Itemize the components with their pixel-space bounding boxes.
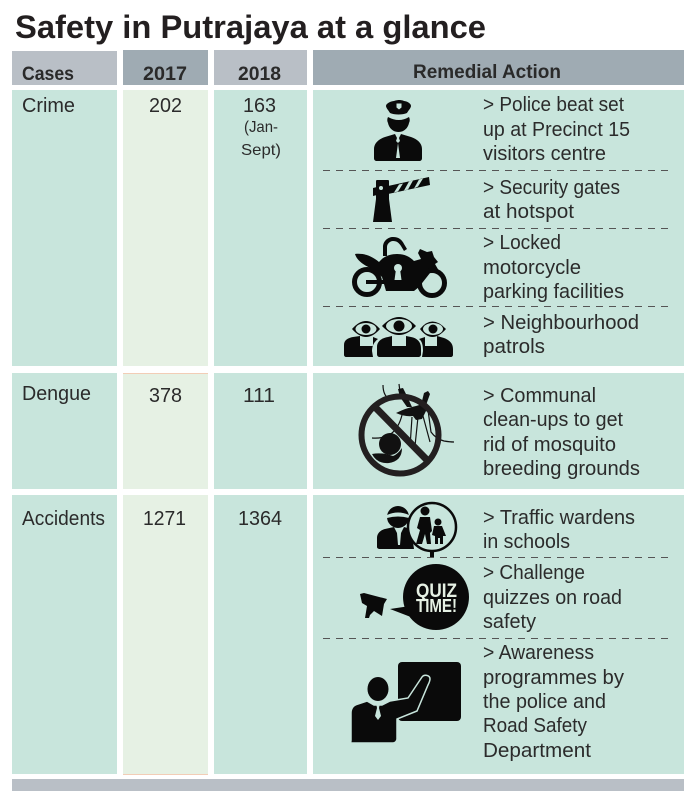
crime 2018 value: Sept) bbox=[241, 142, 281, 159]
icon: traffic warden with school crossing sign bbox=[377, 503, 456, 557]
dengue remedial text: rid of mosquito bbox=[483, 434, 616, 456]
dengue 2018 value bbox=[214, 373, 307, 489]
crime 2018 value: 163 bbox=[243, 95, 276, 117]
dengue label bbox=[12, 373, 117, 489]
accidents remedial text: programmes by bbox=[483, 667, 624, 689]
accidents remedial text: quizzes on road bbox=[483, 587, 622, 609]
crime remedial panel bbox=[313, 90, 684, 366]
header: remedial action bbox=[313, 50, 684, 85]
crime remedial text: patrols bbox=[483, 336, 545, 358]
icon: motorcycle with padlock bbox=[354, 237, 444, 296]
icon: quiz time speech bubble and megaphone: QUIZ bbox=[416, 581, 457, 602]
accidents 2018 value: 1364 bbox=[238, 508, 282, 530]
crime remedial text: > Security gates bbox=[483, 177, 620, 199]
crime remedial text: > Neighbourhood bbox=[483, 312, 639, 334]
crime 2018 value bbox=[214, 90, 307, 366]
dengue remedial panel bbox=[313, 373, 684, 489]
icon: quiz time speech bubble and megaphone bbox=[360, 564, 469, 630]
header: cases: Cases bbox=[22, 63, 74, 85]
accidents remedial text: Department bbox=[483, 740, 591, 762]
row: crime bbox=[12, 90, 684, 366]
row: accidents bbox=[12, 495, 684, 775]
dengue remedial text: > Communal bbox=[483, 385, 596, 407]
header: 2018 bbox=[214, 50, 307, 85]
crime label: Crime bbox=[22, 95, 75, 117]
accidents remedial text: > Challenge bbox=[483, 562, 585, 584]
header: 2017 bbox=[123, 50, 208, 85]
accidents remedial text: safety bbox=[483, 611, 536, 633]
title: Safety in Putrajaya at a glance bbox=[15, 9, 486, 45]
crime remedial text: > Locked bbox=[483, 232, 561, 254]
icon: police officer bbox=[374, 100, 422, 161]
crime 2017 value bbox=[123, 90, 208, 366]
icon: no mosquito sign bbox=[362, 384, 454, 474]
crime remedial text: visitors centre bbox=[483, 143, 606, 165]
header: 2018: 2018 bbox=[238, 63, 281, 85]
icon: neighbourhood watch eyes and people bbox=[344, 317, 453, 357]
accidents remedial panel bbox=[313, 495, 684, 774]
dengue remedial text: breeding grounds bbox=[483, 458, 640, 480]
dengue 2018 value: 111 bbox=[243, 385, 275, 407]
header: cases bbox=[12, 51, 117, 85]
crime remedial text: motorcycle bbox=[483, 257, 581, 279]
dengue 2017 value: 378 bbox=[149, 385, 182, 407]
icon: quiz time speech bubble and megaphone: TIME! bbox=[416, 596, 457, 616]
crime remedial text: up at Precinct 15 bbox=[483, 119, 630, 141]
crime remedial text: parking facilities bbox=[483, 281, 624, 303]
dengue 2017 value bbox=[123, 373, 208, 489]
accidents 2018 value bbox=[214, 495, 307, 774]
crime remedial text: > Police beat set bbox=[483, 94, 624, 116]
crime remedial text: at hotspot bbox=[483, 201, 574, 223]
accidents remedial text: in schools bbox=[483, 531, 570, 553]
icon: security gate barrier bbox=[373, 177, 430, 222]
accidents remedial text: > Awareness bbox=[483, 642, 594, 664]
crime label bbox=[12, 90, 117, 366]
accidents remedial text: Road Safety bbox=[483, 715, 587, 737]
row: dengue bbox=[12, 373, 684, 489]
accidents 2017 value bbox=[123, 495, 208, 775]
header: remedial action: Remedial Action bbox=[413, 61, 561, 83]
accidents remedial text: > Traffic wardens bbox=[483, 507, 635, 529]
dengue remedial text bbox=[483, 385, 640, 480]
accidents remedial text bbox=[483, 507, 635, 762]
accidents remedial text: the police and bbox=[483, 691, 606, 713]
footer bar bbox=[12, 779, 684, 791]
accidents label: Accidents bbox=[22, 508, 105, 530]
header: 2017: 2017 bbox=[143, 63, 187, 85]
accidents label bbox=[12, 495, 117, 774]
accidents 2017 value: 1271 bbox=[143, 508, 186, 530]
dengue remedial text: clean-ups to get bbox=[483, 409, 623, 431]
table header bbox=[12, 50, 684, 85]
crime remedial text bbox=[483, 94, 639, 358]
crime 2017 value: 202 bbox=[149, 95, 182, 117]
crime 2018 value: (Jan- bbox=[244, 119, 278, 136]
dengue label: Dengue bbox=[22, 383, 91, 405]
icon: presenter at blackboard bbox=[351, 662, 461, 743]
